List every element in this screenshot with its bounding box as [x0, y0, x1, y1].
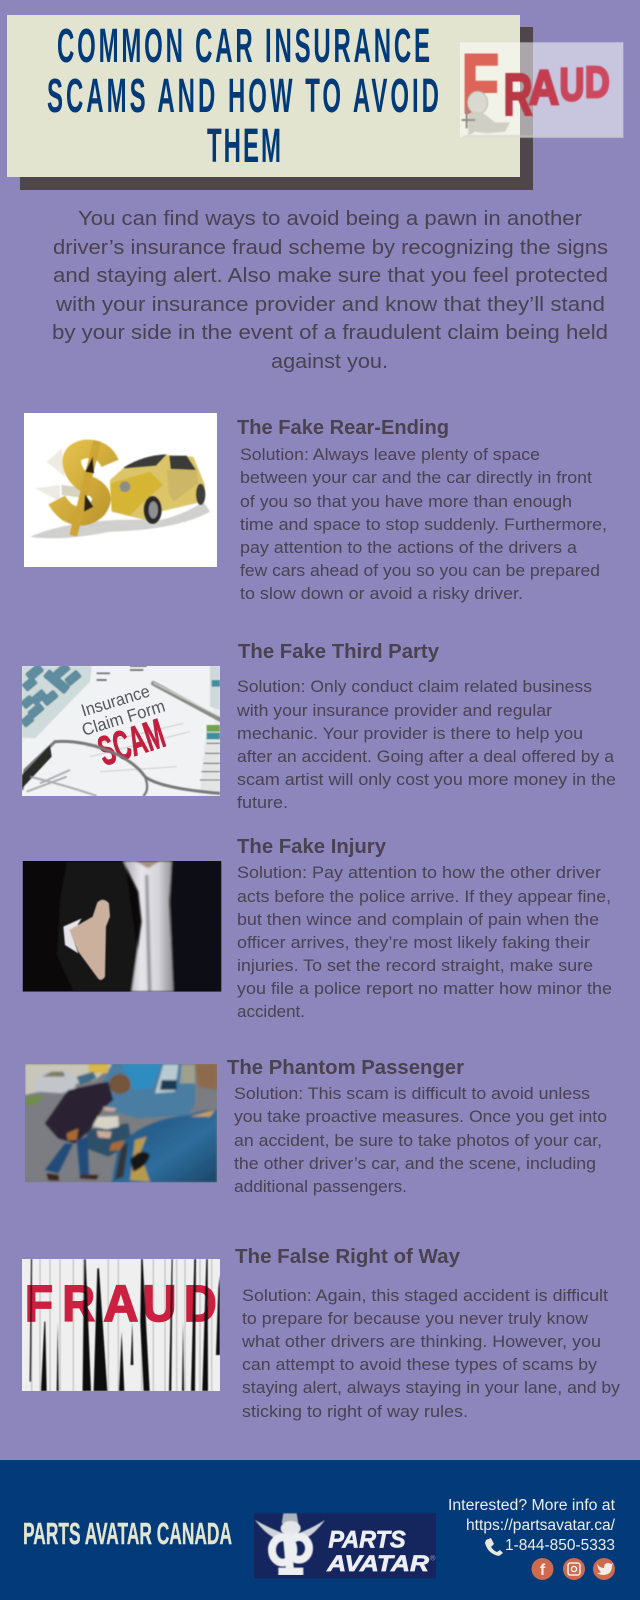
solution text: the other driver’s car, and the scene, including	[234, 1154, 596, 1173]
intro paragraph: against you.	[271, 350, 388, 373]
solution text: Solution: Pay attention to how the other driver	[237, 863, 602, 882]
solution text: you take proactive measures. Once you get into	[234, 1107, 607, 1126]
intro paragraph: and staying alert. Also make sure that you feel protected	[53, 264, 608, 287]
image: insurance claim form scam: Claim Form	[79, 696, 167, 740]
solution text	[234, 1084, 607, 1196]
solution text: but then wince and complain of pain when the	[237, 910, 599, 929]
solution text	[236, 677, 616, 812]
image: shredded FRAUD paper: R	[62, 1275, 95, 1332]
title: THEM	[207, 120, 281, 173]
image: FRAUD letters with figure: A	[529, 61, 559, 115]
intro paragraph: driver’s insurance fraud scheme by recognizing the signs	[53, 236, 608, 259]
solution text: scam artist will only cost you more money in the	[237, 770, 616, 789]
title: SCAMS AND HOW TO AVOID	[47, 70, 439, 123]
solution text: can attempt to avoid these types of scams by	[242, 1355, 598, 1374]
logo: ®	[430, 1554, 436, 1563]
section: The Fake Rear-Ending	[237, 417, 607, 603]
solution text: of you so that you have more than enough	[240, 492, 572, 511]
intro paragraph: with your insurance provider and know that they’ll stand	[55, 293, 605, 316]
solution text: after an accident. Going after a deal offered by a	[237, 747, 615, 766]
solution text: what other drivers are thinking. However, you	[241, 1332, 601, 1351]
icon: phone	[485, 1538, 503, 1556]
image: woman inspecting damaged blue car	[25, 1064, 217, 1182]
icon: twitter	[593, 1558, 615, 1580]
section: The False Right of Way	[235, 1246, 621, 1421]
logo: AVATAR	[326, 1551, 429, 1576]
solution text: pay attention to the actions of the drivers a	[240, 538, 578, 557]
image: shredded FRAUD paper	[22, 1259, 220, 1391]
section: The Fake Injury	[237, 836, 612, 1021]
solution text: few cars ahead of you so you can be prepared	[240, 561, 600, 580]
solution text: between your car and the car directly in front	[240, 468, 592, 487]
section: The Phantom Passenger	[227, 1057, 607, 1196]
icon: facebook: f	[540, 1562, 546, 1579]
footer	[0, 1460, 640, 1600]
icon: facebook	[532, 1558, 554, 1580]
image: shredded FRAUD paper: U	[142, 1275, 176, 1332]
intro paragraph	[52, 207, 608, 373]
section: The Fake Injury: The Fake Injury	[237, 836, 387, 858]
image: insurance claim form scam: SCAM	[93, 710, 170, 775]
section: The Phantom Passenger: The Phantom Passenger	[227, 1057, 464, 1079]
contact text: 1-844-850-5333	[505, 1537, 615, 1554]
solution text: additional passengers.	[234, 1177, 407, 1196]
title banner shadow	[20, 27, 533, 190]
solution text: officer arrives, they’re most likely faking their	[237, 933, 591, 952]
intro paragraph: by your side in the event of a fraudulent claim being held	[52, 321, 608, 344]
solution text: Solution: Always leave plenty of space	[240, 445, 540, 464]
solution text: to prepare for because you never truly know	[242, 1309, 589, 1328]
title banner	[7, 15, 520, 177]
image: FRAUD letters with figure	[460, 37, 623, 138]
section: The Fake Third Party: The Fake Third Party	[238, 641, 440, 663]
solution text	[241, 1286, 621, 1421]
solution text: Solution: Again, this staged accident is difficult	[242, 1286, 608, 1305]
icon: instagram	[563, 1558, 585, 1580]
solution text: acts before the police arrive. If they appear fine,	[237, 887, 611, 906]
solution text: to slow down or avoid a risky driver.	[240, 584, 523, 603]
solution text: accident.	[237, 1002, 305, 1021]
logo	[254, 1513, 436, 1578]
brand name: PARTS AVATAR CANADA	[23, 1516, 232, 1551]
image: insurance claim form scam: Insurance	[79, 681, 152, 720]
contact text: https://partsavatar.ca/	[466, 1517, 616, 1534]
solution text: staying alert, always staying in your lane, and by	[242, 1378, 621, 1397]
image: FRAUD letters with figure: U	[560, 59, 584, 110]
solution text	[237, 863, 612, 1021]
logo: PARTS	[328, 1526, 406, 1553]
solution text: you file a police report no matter how minor the	[237, 979, 612, 998]
image: shredded FRAUD paper: F	[25, 1275, 53, 1332]
image: dollar sign crashing into gold car	[24, 413, 217, 567]
image: shredded FRAUD paper: A	[103, 1275, 138, 1332]
contact text	[448, 1497, 616, 1554]
solution text: injuries. To set the record straight, make sure	[237, 956, 593, 975]
solution text: time and space to stop suddenly. Furthermore,	[240, 515, 607, 534]
image: FRAUD letters with figure: F	[462, 37, 499, 130]
section: The Fake Third Party	[236, 641, 616, 812]
section: The False Right of Way: The False Right of Way	[235, 1246, 461, 1268]
image: insurance claim form scam	[20, 662, 220, 796]
image: FRAUD letters with figure: D	[585, 59, 610, 107]
solution text: sticking to right of way rules.	[242, 1402, 468, 1421]
section: The Fake Rear-Ending: The Fake Rear-Ending	[237, 417, 449, 439]
solution text: Solution: Only conduct claim related business	[237, 677, 592, 696]
image: outstretched hand in a dark suit	[23, 861, 221, 992]
solution text	[240, 445, 607, 603]
image: FRAUD letters with figure: R	[503, 61, 533, 128]
intro paragraph: You can find ways to avoid being a pawn in another	[78, 207, 582, 230]
image: shredded FRAUD paper: D	[184, 1275, 217, 1332]
title: COMMON CAR INSURANCE	[57, 20, 430, 73]
solution text: an accident, be sure to take photos of your car,	[234, 1131, 602, 1150]
solution text: future.	[237, 793, 288, 812]
contact text: Interested? More info at	[448, 1497, 616, 1514]
solution text: with your insurance provider and regular	[236, 701, 552, 720]
solution text: mechanic. Your provider is there to help you	[237, 724, 583, 743]
title	[47, 20, 439, 173]
solution text: Solution: This scam is difficult to avoid unless	[234, 1084, 590, 1103]
